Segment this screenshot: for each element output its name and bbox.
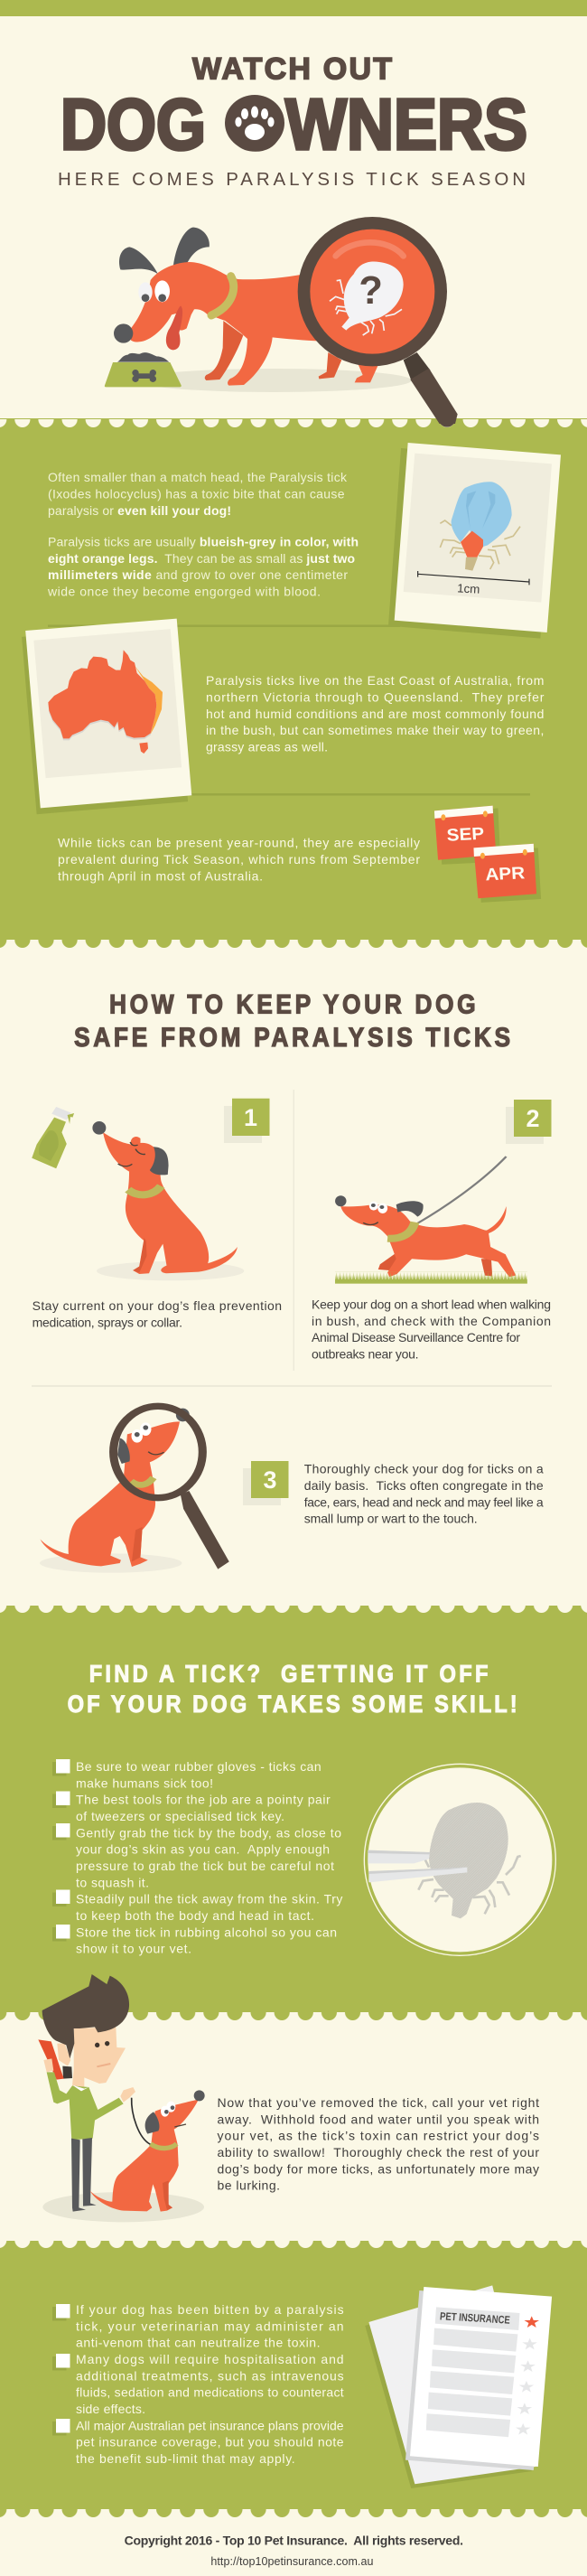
checklist: treatment and insurance: additional treatments, such as intravenous: [76, 2368, 344, 2383]
vet advice text: dog’s body for more ticks, as unfortunately more may: [217, 2161, 539, 2176]
polaroid: tick 1cm: 1cm: [457, 581, 480, 596]
checklist: treatment and insurance: [52, 2302, 344, 2466]
checklist: treatment and insurance: side effects.: [76, 2402, 145, 2416]
footer: http://top10petinsurance.com.au: [210, 2555, 373, 2568]
illustration: pet insurance documents: PET INSURANCE: [439, 2310, 510, 2327]
polaroid: tick 1cm: [388, 443, 561, 639]
checklist: tick removal: [52, 1759, 342, 1956]
vet advice text: be lurking.: [217, 2178, 280, 2193]
magnifier handle: [404, 352, 458, 427]
heading: how to keep your dog safe: HOW TO KEEP YOUR DOG: [109, 988, 476, 1019]
illustration: man phoning vet with dog: [38, 1974, 205, 2222]
ground shadow: [135, 369, 412, 392]
heading: find a tick: OF YOUR DOG TAKES SOME SKILL!: [68, 1691, 517, 1718]
intro text: [48, 470, 348, 518]
step 2 text: Animal Disease Surveillance Centre for: [312, 1330, 520, 1344]
checklist: tick removal: make humans sick too!: [76, 1775, 213, 1790]
tongue: [166, 305, 182, 350]
illustration: walking dog on grass: [335, 1157, 527, 1284]
habitat text: [206, 673, 545, 754]
checklist: treatment and insurance: anti-venom that can neutralize the toxin.: [76, 2336, 320, 2350]
season text: prevalent during Tick Season, which runs from September: [58, 852, 420, 866]
dog: [89, 2099, 199, 2212]
checklist: treatment and insurance: Many dogs will require hospitalisation and: [76, 2352, 344, 2366]
step 3 text: small lump or wart to the touch.: [304, 1512, 478, 1526]
step 3 text: Thoroughly check your dog for ticks on a: [304, 1462, 544, 1476]
checklist: treatment and insurance: pet insurance coverage, but you should note: [76, 2435, 344, 2450]
step 1 text: medication, sprays or collar.: [33, 1316, 182, 1330]
habitat text: northern Victoria through to Queensland. They prefer: [206, 690, 545, 705]
step 2 badge: [506, 1100, 551, 1144]
intro text: (Ixodes holocyclus) has a toxic bite that can cause: [48, 486, 345, 501]
vet advice text: ability to swallow! Thoroughly check the rest of your: [217, 2145, 539, 2159]
rear legs: [319, 352, 341, 379]
icon: tick with question mark: [330, 261, 404, 335]
step 2 text: outbreaks near you.: [312, 1346, 419, 1361]
checklist: tick removal: to squash it.: [76, 1875, 149, 1889]
icon: SEP and APR calendars: [434, 806, 541, 903]
illustration: spray bottle and sitting dog: [32, 1107, 244, 1280]
step 3 text: face, ears, head and neck and may feel like a: [304, 1494, 544, 1509]
habitat text: grassy areas as well.: [206, 739, 328, 754]
vet advice text: Now that you’ve removed the tick, call your vet right: [217, 2095, 539, 2110]
habitat text: hot and humid conditions and are most commonly found: [206, 707, 544, 721]
illustration: pet insurance documents: [365, 2285, 552, 2488]
step 3 text: [304, 1462, 544, 1526]
title: WNERS: [285, 84, 527, 164]
icon: paw in the O: [225, 95, 284, 151]
nose: [114, 323, 133, 343]
vet advice text: your vet, as the tick’s toxin can restrict your dog’s: [217, 2129, 539, 2143]
illustration: tweezers removing tick: [364, 1764, 555, 1955]
panel: tick facts: [22, 443, 561, 903]
step 1 text: Stay current on your dog’s flea prevention: [33, 1298, 282, 1313]
season text: through April in most of Australia.: [58, 869, 263, 884]
icon: spray bottle: [32, 1107, 74, 1168]
step 3 text: daily basis. Ticks often congregate in the: [304, 1478, 544, 1493]
illustration: dog under magnifier: [40, 1406, 229, 1573]
collar: [211, 276, 234, 315]
step 2 text: [312, 1297, 551, 1361]
polaroid: Australia map: [22, 619, 191, 814]
intro text: Often smaller than a match head, the Paralysis tick: [48, 470, 348, 484]
vet advice text: away. Withhold food and water until you speak with: [217, 2112, 539, 2126]
icon: SEP and APR calendars: APR: [485, 864, 526, 885]
heading: how to keep your dog safe: [74, 988, 510, 1052]
checklist: treatment and insurance: the benefit sub-limit that may apply.: [76, 2451, 295, 2466]
checklist: treatment and insurance: If your dog has been bitten by a paralysis: [76, 2302, 344, 2317]
eyes: [138, 280, 170, 302]
checklist: tick removal: The best tools for the job are a pointy pair: [76, 1793, 331, 1807]
grass: [335, 1271, 527, 1284]
step 1 badge: 1: [244, 1104, 257, 1131]
title: DOG: [61, 84, 206, 164]
checklist: tick removal: Store the tick in rubbing alcohol so you can: [76, 1925, 337, 1939]
season text: While ticks can be present year-round, they are especially: [58, 835, 420, 849]
footer: Copyright 2016 - Top 10 Pet Insurance. All rights reserved.: [125, 2534, 463, 2548]
magnifier: [114, 1406, 229, 1569]
step 2 text: in bush, and check with the Companion: [312, 1314, 551, 1328]
step 3 badge: [243, 1461, 289, 1505]
sweater: [47, 2072, 124, 2140]
checklist: tick removal: pressure to grab the tick but be careful not: [76, 1859, 334, 1873]
phone: [38, 2039, 64, 2080]
title: WATCH OUT: [192, 52, 392, 87]
checklist: tick removal: Gently grab the tick by the body, as close to: [76, 1825, 341, 1840]
title: [58, 52, 527, 190]
illustration: dog eating with magnifier: [105, 217, 458, 427]
dog body: [131, 262, 322, 386]
checklist: treatment and insurance: fluids, sedation and medications to counteract: [76, 2385, 344, 2400]
checklist: tick removal: Be sure to wear rubber gloves - ticks can: [76, 1759, 321, 1774]
heading: how to keep your dog safe: SAFE FROM PARALYSIS TICKS: [74, 1021, 510, 1052]
icon: food bowl: [105, 352, 182, 387]
description text: wide once they become engorged with blood.: [47, 584, 321, 598]
icon: SEP and APR calendars: SEP: [446, 824, 485, 846]
checklist: tick removal: Steadily pull the tick away from the skin. Try: [76, 1892, 342, 1906]
title: O: [228, 84, 284, 164]
icon: tick with question mark: ?: [359, 269, 383, 313]
checklist: tick removal: of tweezers or specialised tick key.: [76, 1809, 284, 1823]
habitat text: in the bush, but can sometimes make their way to green,: [206, 723, 544, 737]
checklist: tick removal: show it to your vet.: [76, 1942, 191, 1956]
ears: [119, 247, 158, 274]
hair: [42, 1974, 129, 2058]
face: [72, 2027, 126, 2087]
description text: [47, 535, 359, 598]
leash: [132, 2098, 151, 2144]
magnifier lens: [298, 217, 447, 366]
vet advice text: [217, 2095, 539, 2193]
checklist: tick removal: to keep both the body and head in tact.: [76, 1908, 314, 1923]
dark front leg: [205, 321, 243, 380]
checklist: tick removal: your dog’s skin as you can. Apply enough: [76, 1842, 330, 1857]
intro text: paralysis or even kill your dog!: [48, 503, 231, 518]
checklist: treatment and insurance: All major Australian pet insurance plans provide: [76, 2418, 344, 2432]
description text: millimeters wide and grow to over one centimeter: [48, 567, 348, 582]
trousers: [71, 2139, 86, 2212]
ear: [57, 2044, 70, 2066]
title: HERE COMES PARALYSIS TICK SEASON: [58, 169, 526, 190]
tweezers: [368, 1850, 467, 1882]
habitat text: Paralysis ticks live on the East Coast of Australia, from: [206, 673, 544, 688]
step 2 badge: 2: [526, 1105, 540, 1132]
heading: find a tick: [68, 1661, 517, 1718]
step 3 badge: 3: [263, 1466, 277, 1494]
season text: [58, 835, 420, 884]
step 2 text: Keep your dog on a short lead when walking: [312, 1297, 551, 1312]
step 1 text: [33, 1298, 282, 1330]
checklist: treatment and insurance: tick, your veterinarian may administer an: [76, 2318, 344, 2333]
heading: find a tick: FIND A TICK? GETTING IT OFF: [89, 1661, 488, 1688]
footer: [125, 2534, 463, 2568]
description text: Paralysis ticks are usually blueish-grey in color, with: [48, 535, 359, 549]
description text: eight orange legs. They can be as small as just two: [48, 551, 355, 566]
step 1 badge: [224, 1099, 269, 1143]
